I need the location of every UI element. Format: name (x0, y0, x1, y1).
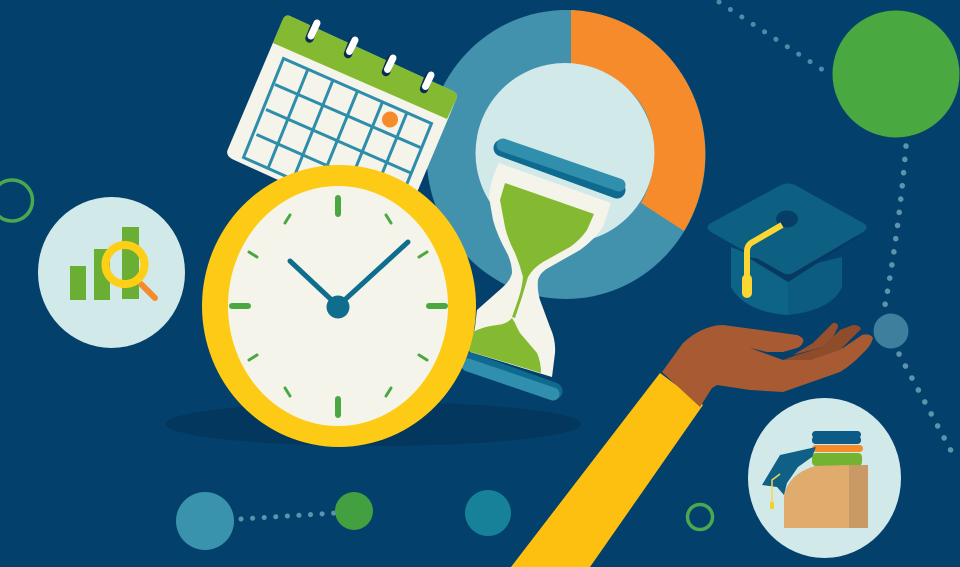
cap board (708, 184, 866, 274)
dotted connector: right vertical (885, 146, 906, 305)
badge background (748, 398, 901, 558)
hourglass top bar (502, 145, 619, 190)
circle: bottom green (335, 492, 373, 530)
hand (662, 323, 873, 407)
books stack (812, 431, 863, 466)
dotted connector: lower right (899, 354, 956, 460)
box (784, 465, 849, 528)
cap base right (788, 257, 842, 315)
yellow sleeve (511, 373, 703, 567)
small cap (762, 447, 816, 495)
clock rim (202, 165, 476, 447)
small tassel (772, 474, 780, 509)
calendar marker (382, 112, 398, 128)
clock center (326, 296, 350, 318)
dotted connector: bottom (241, 513, 335, 519)
calendar grid (244, 58, 432, 223)
donut inner circle (476, 63, 654, 243)
index finger (793, 323, 838, 355)
middle finger (783, 325, 861, 360)
ring: bottom green (688, 504, 712, 530)
panel: chart badge (38, 197, 185, 348)
donut orange segment (571, 10, 705, 231)
circle: bottom blue (176, 492, 234, 550)
clock hands (290, 242, 408, 306)
calendar rings (310, 23, 431, 89)
clock ticks (232, 198, 445, 415)
badge background (38, 197, 185, 348)
icon: magnifying glass (106, 245, 155, 298)
cap board shadow (747, 234, 863, 282)
clock (202, 165, 476, 447)
calendar header (273, 15, 457, 119)
ring: left green (0, 180, 32, 221)
cap base left (731, 247, 788, 315)
cap tassel (747, 225, 782, 293)
donut chart (426, 10, 706, 299)
palm and thumb (662, 325, 873, 407)
shadow under clock (165, 402, 581, 446)
hourglass bottom bar (468, 361, 554, 394)
hourglass glass (470, 163, 611, 377)
calendar page (227, 15, 457, 235)
circle: large green (832, 10, 960, 138)
bar chart (70, 227, 139, 300)
hourglass top sand (500, 183, 594, 318)
graduation cap (708, 184, 866, 315)
clock face (228, 186, 448, 426)
circle: bottom teal (465, 490, 511, 536)
panel: box badge (748, 398, 901, 558)
hourglass bottom sand (468, 318, 541, 373)
dotted connector: top right (719, 2, 832, 76)
hourglass (468, 145, 619, 394)
calendar (227, 15, 457, 235)
circle: steel node (874, 314, 908, 348)
cap button (776, 210, 798, 228)
